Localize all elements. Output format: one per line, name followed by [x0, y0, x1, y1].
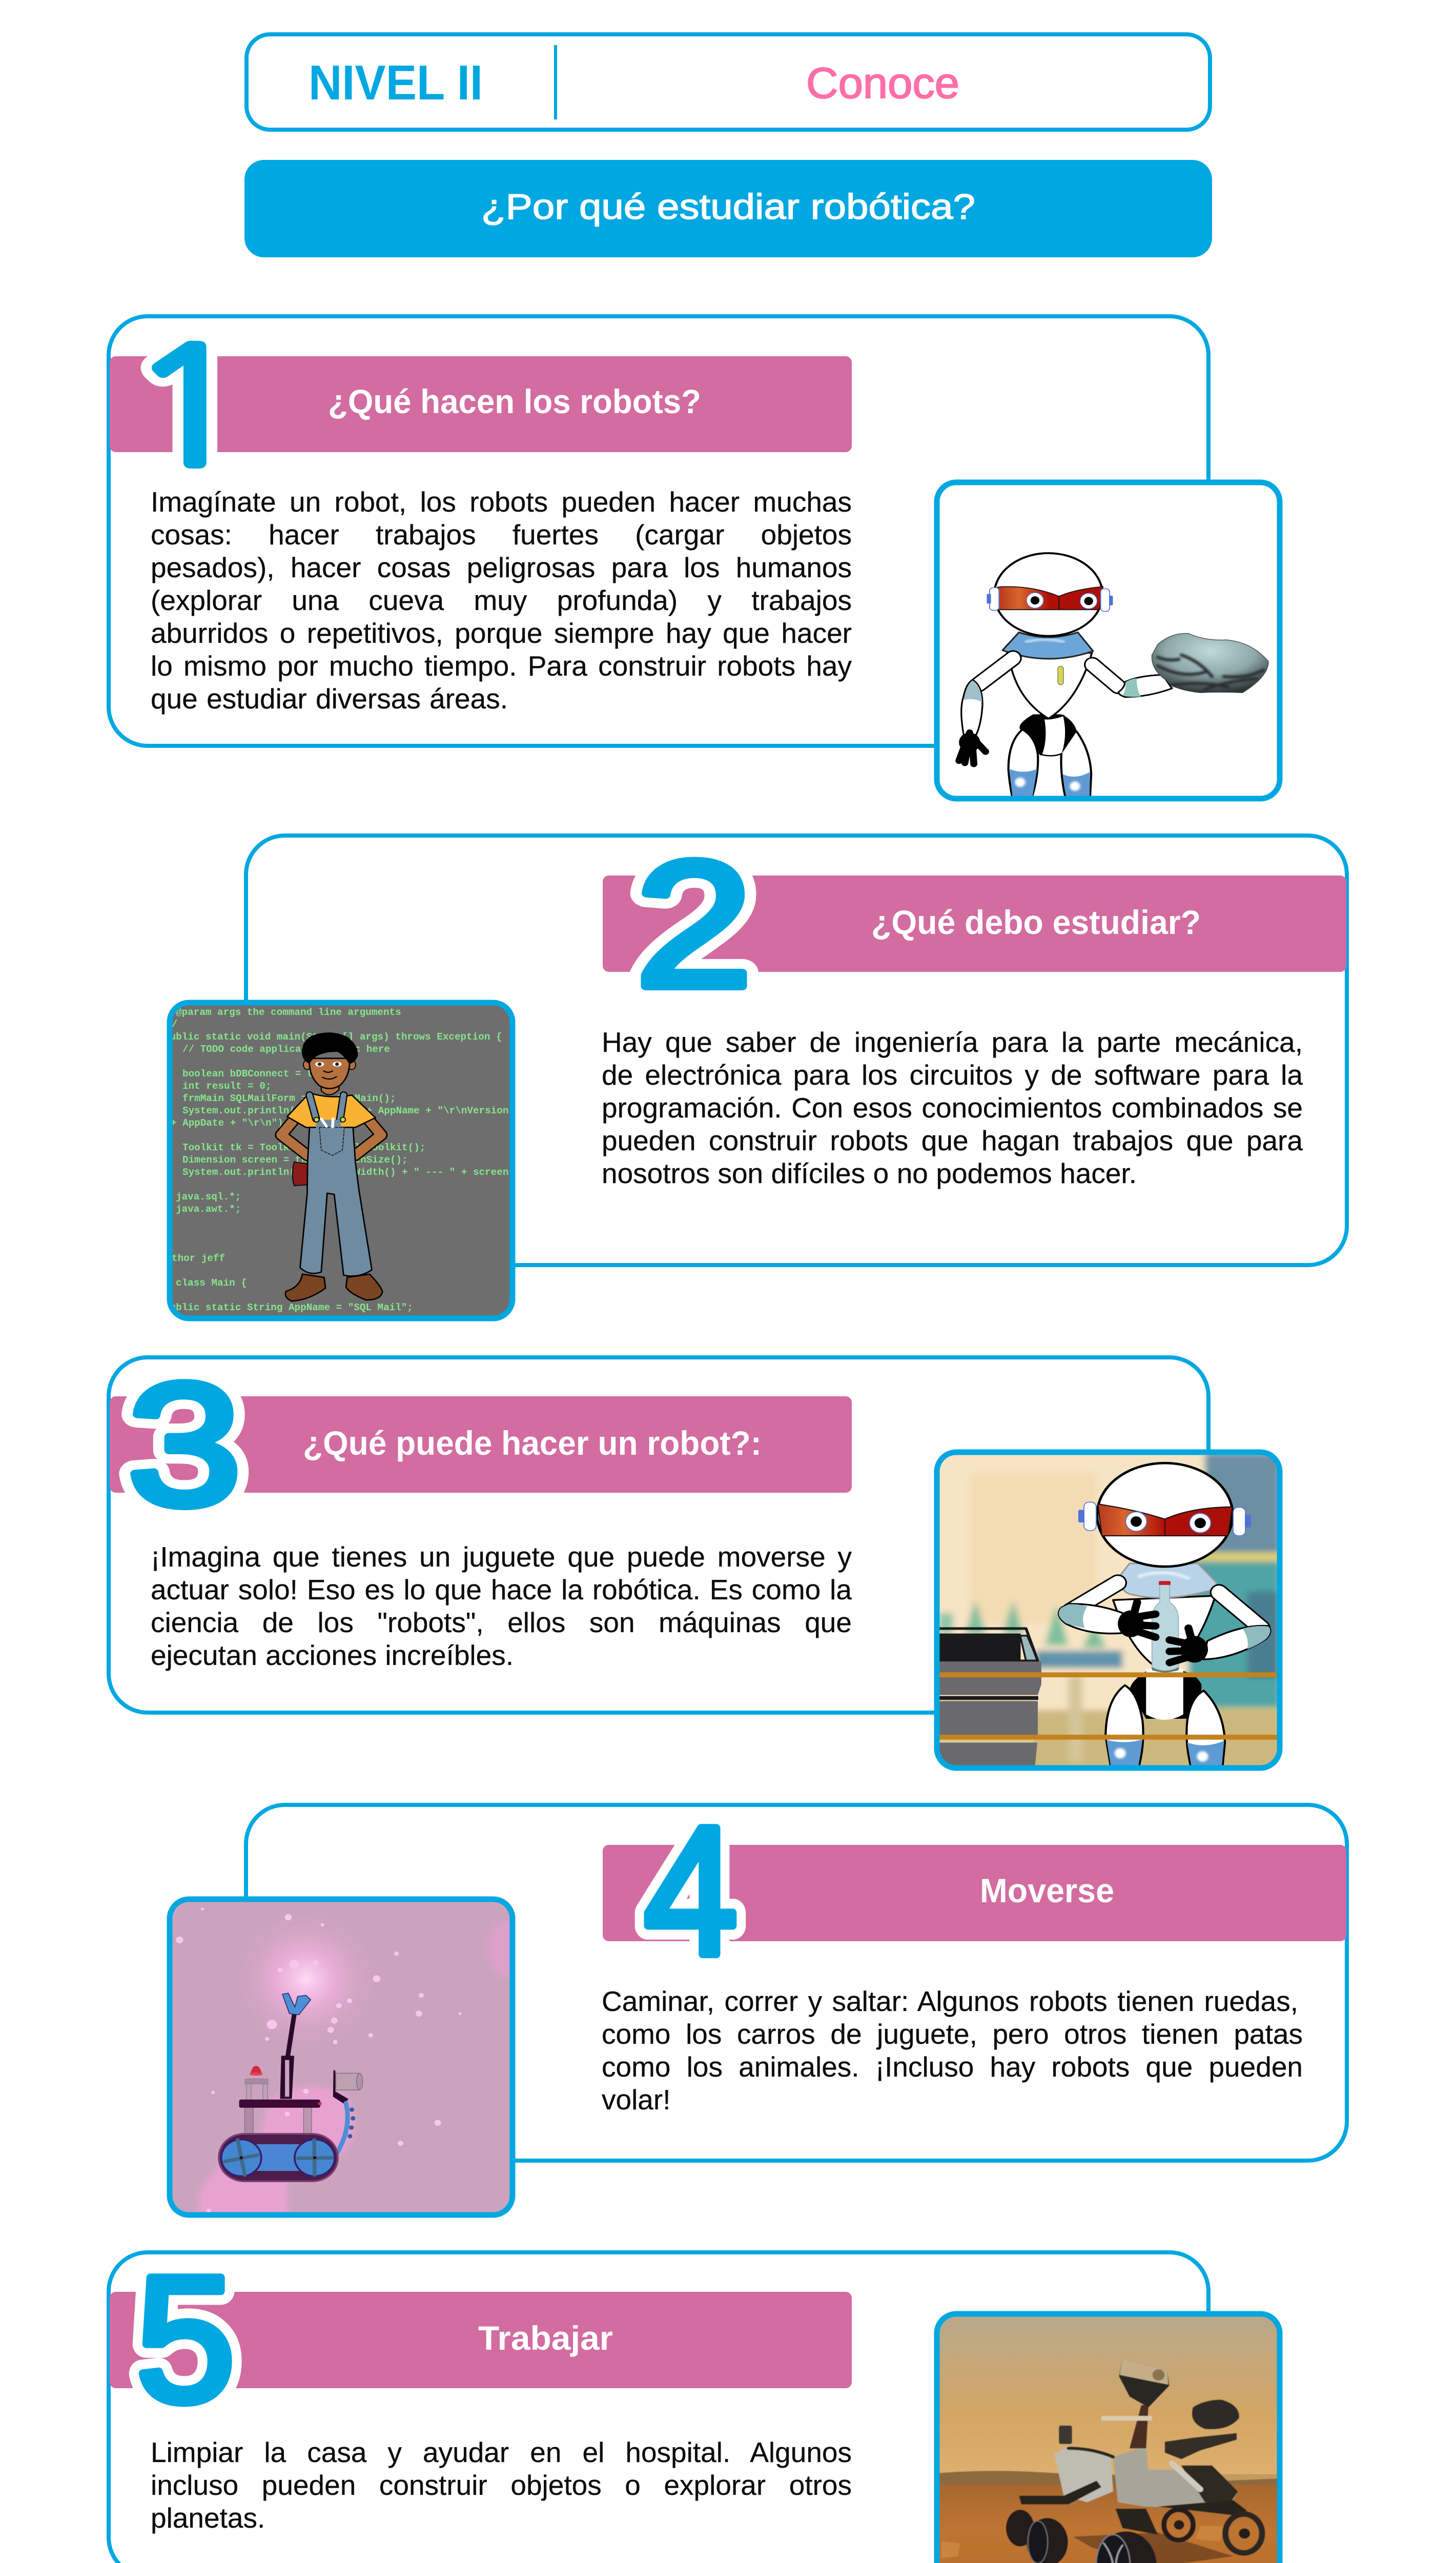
code background: frmMain SQLMailForm = new frmMain();	[182, 1093, 396, 1104]
code background: Dimension screen = tk.getScreenSize();	[182, 1154, 408, 1166]
image 4: tracked robot on pink background	[170, 1899, 521, 2215]
code background: int result = 0;	[182, 1081, 272, 1092]
number 3: 3	[127, 1347, 242, 1541]
body text 4: Caminar, correr y saltar: Algunos robots tienen ruedas,	[602, 1985, 1298, 2017]
mast	[1130, 2405, 1149, 2448]
robotic arm	[1192, 2400, 1239, 2429]
number 4: 4	[644, 1788, 737, 1993]
body text 5	[151, 2436, 868, 2544]
wheels	[1006, 2510, 1034, 2547]
code background: thor jeff	[172, 1253, 225, 1264]
body text 5: Limpiar la casa y ayudar en el hospital. Algunos	[151, 2436, 852, 2468]
number 5: 5	[136, 2239, 235, 2439]
body text 1	[151, 485, 868, 721]
body text 1: pesados), hacer cosas peligrosas para los humanos	[151, 552, 852, 583]
image 5: Mars rover	[937, 2314, 1280, 2563]
level header box	[247, 34, 1210, 130]
code background: @param args the command line arguments	[176, 1007, 401, 1018]
forearms and hands	[1059, 1604, 1130, 1634]
body text 1: que estudiar diversas áreas.	[151, 683, 508, 715]
body text 2	[602, 1026, 1319, 1200]
panel 1: ¿Qué hacen los robots?	[109, 316, 1280, 799]
code background: public static String AppName = "SQL Mail";	[164, 1302, 413, 1313]
body text 1: aburridos o repetitivos, porque siempre hay que hacer	[151, 617, 852, 649]
code background	[172, 1008, 508, 1312]
body text 1: lo mismo por mucho tiempo. Para construir robots hay	[151, 650, 852, 682]
body text 3: ¡Imagina que tienes un juguete que puede moverse y	[151, 1541, 852, 1573]
shelf lines	[939, 1672, 1278, 1677]
panel 4: Moverse	[170, 1788, 1347, 2215]
number 1: 1	[128, 327, 250, 488]
number 1: 1	[128, 327, 250, 488]
code background: public static void main(String[] args) throws Exception {	[164, 1031, 502, 1043]
heading bar 1	[110, 356, 852, 452]
body text 2: nosotros son difíciles o no podemos hacer.	[602, 1157, 1137, 1189]
number 3: 3	[127, 1347, 242, 1541]
body text 1: cosas: hacer trabajos fuertes (cargar objetos	[151, 519, 852, 551]
body text 2: de electrónica para los circuitos y de software para la	[602, 1059, 1303, 1091]
image 3: robot holding a bottle	[937, 1452, 1280, 1771]
robot	[1130, 1671, 1201, 1719]
code background: // TODO code application logic here	[182, 1044, 390, 1055]
body text 5: incluso pueden construir objetos o explorar otros	[151, 2469, 852, 2501]
image 2: boy in overalls in front of source code	[167, 1000, 516, 1321]
blurred room background	[939, 1453, 1280, 1771]
heading bar 4: Moverse	[980, 1872, 1114, 1909]
heading bar 5	[110, 2292, 852, 2388]
body text 5: planetas.	[151, 2502, 265, 2534]
body text 4: volar!	[602, 2084, 670, 2116]
body text 4: como los animales. ¡Incluso hay robots que pueden	[602, 2051, 1303, 2083]
heading bar 3	[110, 1396, 852, 1493]
number 2: 2	[635, 824, 753, 1025]
panel 5: Trabajar	[109, 2239, 1280, 2563]
heading bar 2	[603, 876, 1346, 972]
panel 2: ¿Qué debo estudiar?	[164, 824, 1347, 1318]
title banner: ¿Por qué estudiar robótica?	[481, 187, 975, 227]
rover body	[1054, 2446, 1113, 2502]
body text 3: ciencia de los "robots", ellos son máquinas que	[151, 1606, 852, 1638]
body text 4	[602, 1985, 1319, 2128]
body text 4: como los carros de juguete, pero otros tienen patas	[602, 2018, 1303, 2050]
body text 1: (explorar una cueva muy profunda) y trabajos	[151, 584, 852, 616]
code background: System.out.println("AppName: " + AppName + "\r\nVersion" + AppVersion	[182, 1105, 591, 1116]
body text 3	[151, 1540, 868, 1679]
heading bar 5: Trabajar	[478, 2319, 613, 2357]
particles	[176, 1907, 462, 2212]
bottle	[1152, 1584, 1179, 1672]
level label: NIVEL II	[309, 55, 483, 110]
heading bar 4	[603, 1845, 1346, 1941]
number 4: 4	[644, 1788, 737, 1993]
body text 2: programación. Con esos conocimientos combinados se	[602, 1092, 1303, 1124]
code background: + AppDate + "\r\n");	[171, 1117, 289, 1129]
body text 3: actuar solo! Eso es lo que hace la robótica. Es como la	[151, 1574, 852, 1605]
number 5: 5	[136, 2239, 235, 2439]
rover	[280, 2056, 294, 2099]
filing cabinet	[939, 1629, 1041, 1766]
code background: class Main {	[176, 1277, 247, 1289]
panel 3: ¿Qué puede hacer un robot?	[109, 1347, 1280, 1771]
heading bar 3: ¿Qué puede hacer un robot?:	[303, 1424, 762, 1462]
code background: java.sql.*;	[176, 1191, 241, 1203]
code background: boolean bDBConnect = true;	[182, 1068, 337, 1080]
body text 3: ejecutan acciones increíbles.	[151, 1639, 514, 1671]
image 1: robot holding a rock	[937, 482, 1280, 799]
body text 2: Hay que saber de ingeniería para la parte mecánica,	[602, 1026, 1303, 1058]
body text 2: pueden construir robots que hagan trabajos que para	[602, 1125, 1303, 1156]
suspension	[1019, 2480, 1101, 2505]
code background: java.awt.*;	[176, 1204, 241, 1215]
code background: System.out.println(screen.getWidth() + " --- " + screen.getHeight());	[182, 1167, 591, 1178]
heading bar 2: ¿Qué debo estudiar?	[871, 903, 1201, 941]
number 2: 2	[635, 824, 753, 1025]
title banner	[244, 160, 1212, 257]
heading bar 1: ¿Qué hacen los robots?	[328, 382, 701, 420]
code background: Toolkit tk = Toolkit.getDefaultToolkit();	[182, 1142, 425, 1153]
section label: Conoce	[806, 59, 959, 107]
code background: /	[172, 1019, 178, 1030]
body text 1: Imagínate un robot, los robots pueden hacer muchas	[151, 486, 852, 518]
